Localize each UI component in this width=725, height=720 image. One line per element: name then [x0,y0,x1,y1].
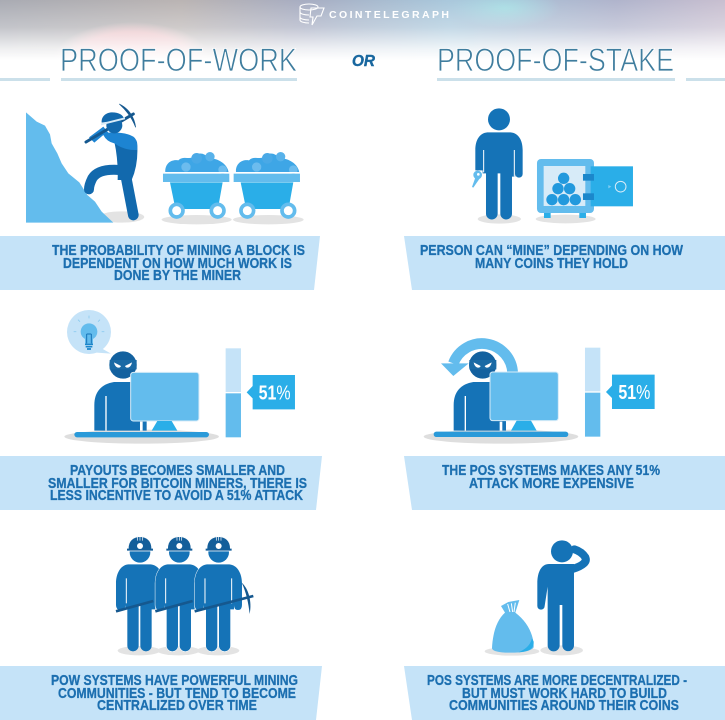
illustration: miner with mountain and carts [26,104,304,224]
illustration: attacker with idea bulb and 51% gauge: 51% [259,382,291,404]
caption band: payouts [0,456,322,510]
logo: Cointelegraph: COINTELEGRAPH [329,9,449,21]
caption band: decentralization [404,666,725,720]
title: Proof-of-Work: PROOF-OF-WORK [60,42,297,78]
illustration: attacker with return arrow and 51% gauge [424,344,655,444]
illustration: person scratching head beside empty bag [485,540,586,656]
caption band: mining communities [0,666,322,720]
illustration: three miners with pickaxes [116,537,253,655]
caption band: mining probability: DONE BY THE MINER [114,268,241,284]
caption band: attack cost: ATTACK MORE EXPENSIVE [469,476,634,492]
caption band: mining probability [0,236,320,290]
caption band: attack cost [404,456,725,510]
title: Proof-of-Stake: PROOF-OF-STAKE [437,42,674,78]
illustration: attacker with idea bulb and 51% gauge [64,310,295,444]
header background [0,0,725,54]
caption band: mining communities: POW SYSTEMS HAVE POWERFUL MINING [51,673,298,689]
caption band: decentralization: COMMUNITIES AROUND THEIR COINS [449,698,679,714]
illustration: person with key and coin safe [472,108,633,224]
caption band: payouts: PAYOUTS BECOMES SMALLER AND [70,463,285,479]
caption band: decentralization: BUT MUST WORK HARD TO BUILD [462,686,667,702]
caption band: payouts: SMALLER FOR BITCOIN MINERS, THERE IS [48,476,307,492]
caption band: attack cost: THE POS SYSTEMS MAKES ANY 51% [442,463,660,479]
caption band: mining probability: DEPENDENT ON HOW MUCH WORK IS [63,256,292,272]
illustration: attacker with return arrow and 51% gauge: 51% [618,382,650,404]
caption band: coins held: PERSON CAN “MINE” DEPENDING ON HOW [420,243,683,259]
heading: OR: OR [352,53,376,70]
caption band: mining communities: COMMUNITIES - BUT TEND TO BECOME [58,686,296,702]
caption band: coins held [404,236,725,290]
caption band: coins held: MANY COINS THEY HOLD [475,256,628,272]
caption band: mining probability: THE PROBABILITY OF MINING A BLOCK IS [52,243,305,259]
caption band: mining communities: CENTRALIZED OVER TIME [97,698,257,714]
logo: Cointelegraph [300,4,449,25]
caption band: payouts: LESS INCENTIVE TO AVOID A 51% ATTACK [50,488,303,504]
